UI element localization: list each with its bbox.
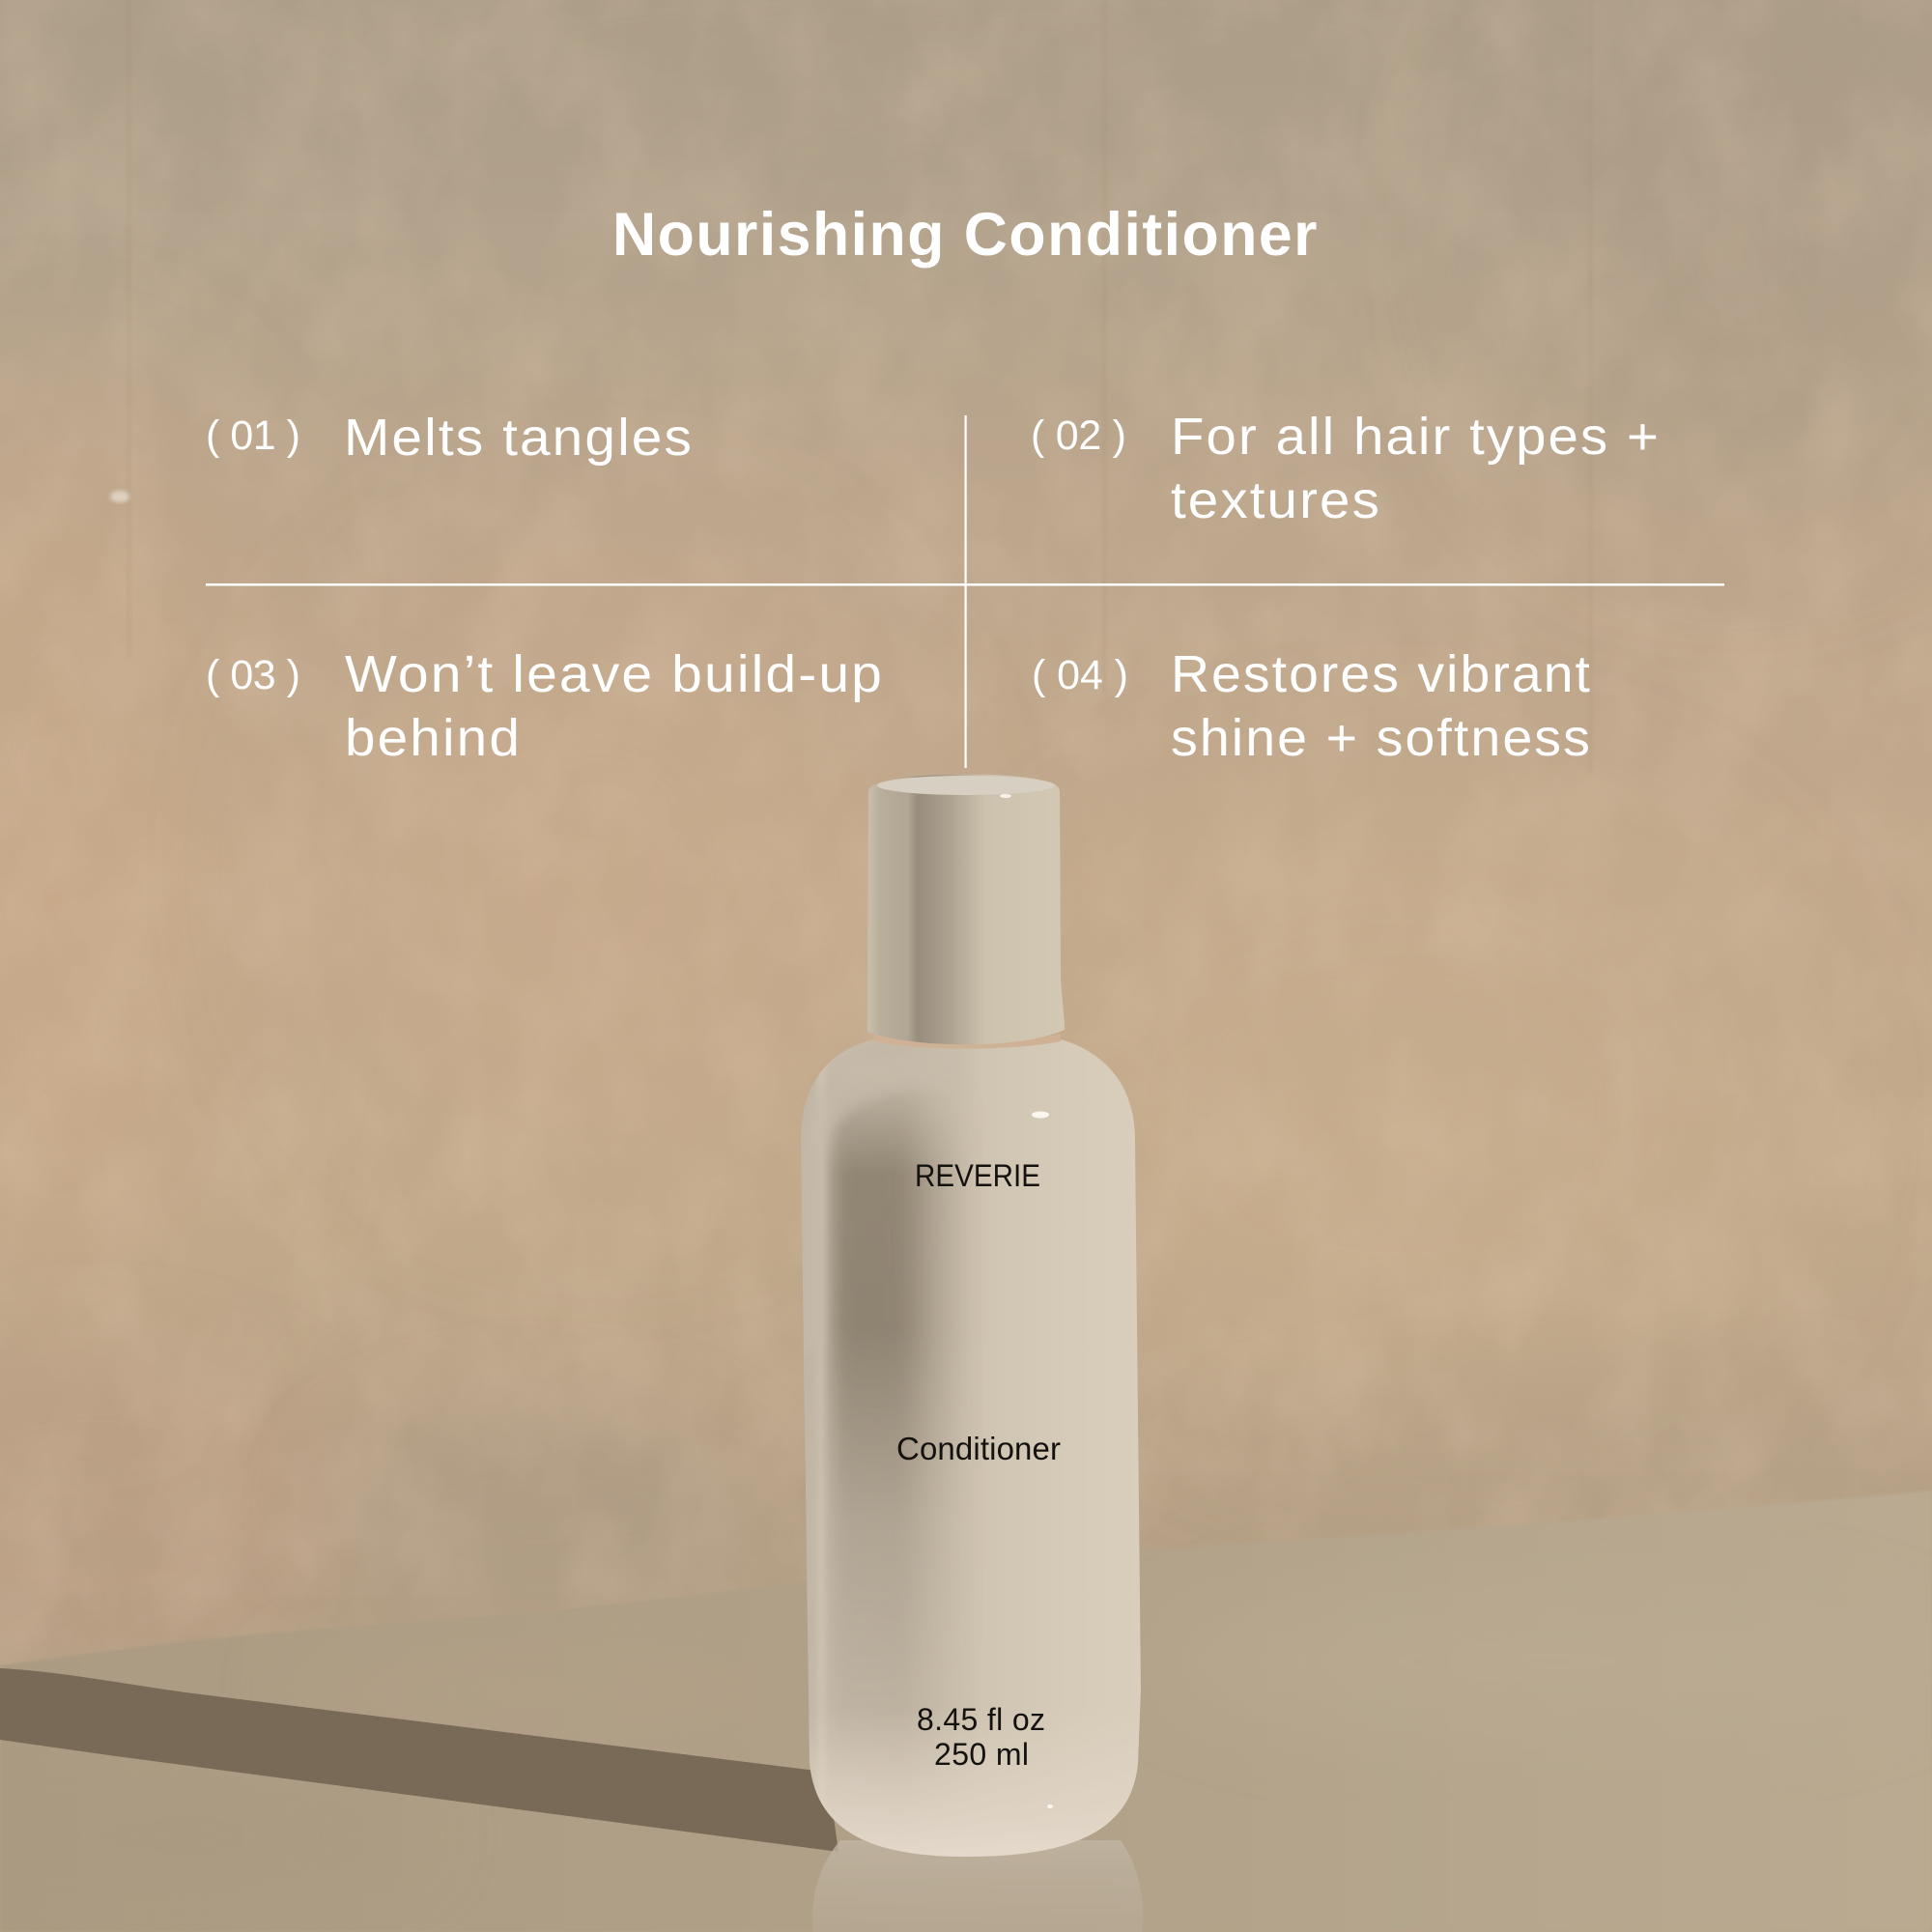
item 03: behind <box>345 709 522 767</box>
label: volume: 8.45 fl oz <box>917 1702 1045 1737</box>
floor surface <box>0 1491 1932 1932</box>
item 04: Restores vibrant <box>1171 645 1592 703</box>
item 01: ( 01 ) <box>206 412 300 459</box>
item 04: shine + softness <box>1171 709 1592 767</box>
label: volume <box>917 1702 1045 1772</box>
item 02 <box>1031 408 1661 529</box>
item 02: ( 02 ) <box>1031 412 1126 459</box>
bottle <box>792 775 1150 1864</box>
item 04: ( 04 ) <box>1032 652 1128 698</box>
item 03: Won’t leave build-up <box>345 645 884 703</box>
label: brand: REVERIE <box>915 1158 1040 1193</box>
label: volume: 250 ml <box>934 1737 1029 1772</box>
title: Nourishing Conditioner <box>612 201 1319 269</box>
item 02: textures <box>1171 471 1381 529</box>
item 03 <box>206 645 884 767</box>
cast shadow of bottle <box>0 1668 838 1852</box>
item 03: ( 03 ) <box>206 652 300 698</box>
grid lines <box>206 415 1724 768</box>
neck ring <box>874 1034 1061 1049</box>
item 04 <box>1032 645 1592 767</box>
item 02: For all hair types + <box>1171 408 1661 466</box>
bottle body <box>792 1024 1150 1864</box>
bottle cap <box>867 775 1065 1044</box>
item 01 <box>206 409 694 467</box>
bottle reflection <box>812 1840 1143 1932</box>
item 01: Melts tangles <box>344 409 694 467</box>
label: product name: Conditioner <box>896 1431 1061 1466</box>
